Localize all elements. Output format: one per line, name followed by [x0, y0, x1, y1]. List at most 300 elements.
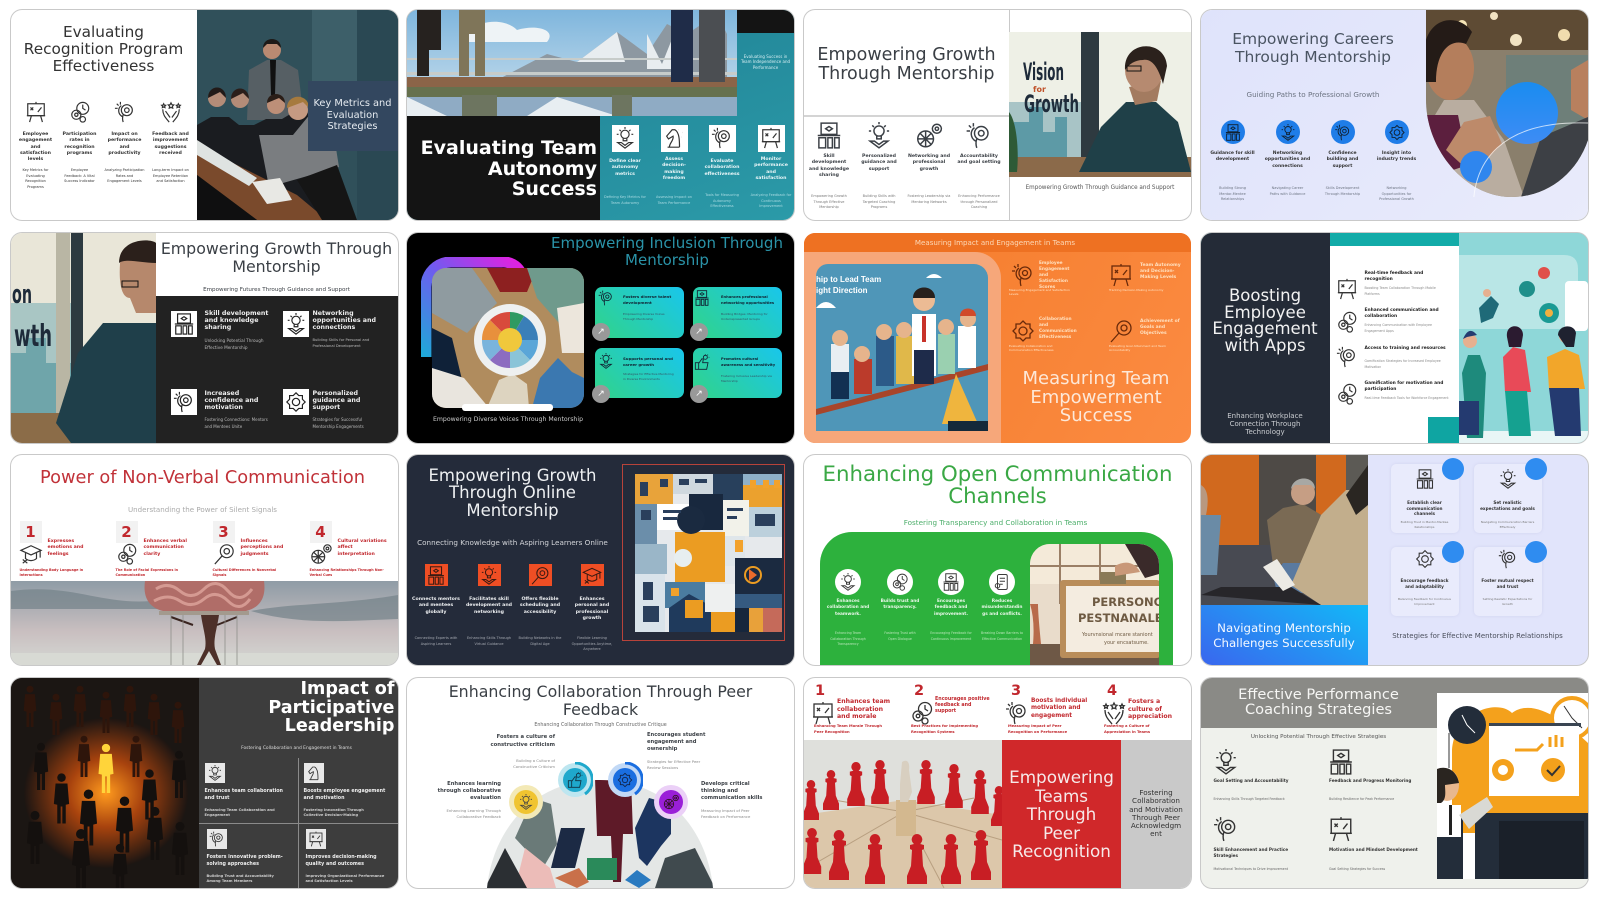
gray block: Through Peer	[1132, 813, 1180, 822]
title: Effective Performance	[1238, 686, 1399, 703]
photo: glowing figure in a crowd	[10, 678, 198, 888]
item: define metrics: autonomy	[612, 165, 638, 170]
item: teamwork: collaboration and	[827, 605, 869, 610]
item: misunderstandings: misunderstandin	[982, 605, 1022, 610]
item: confidence	[1324, 120, 1360, 196]
item 1: 1	[815, 683, 825, 699]
item: teamwork: Enhancing Team Collaboration Through Transparency	[830, 631, 866, 646]
card: channels: communication	[1406, 506, 1443, 510]
item 1: Enhances team	[837, 698, 890, 705]
item: guidance: Guidance for skill development	[1210, 151, 1255, 162]
navy side panel	[1200, 233, 1330, 443]
item: decision freedom: making	[664, 170, 684, 175]
title: Recognition Program	[24, 40, 183, 58]
text: learning: Collaborative Feedback	[457, 814, 501, 819]
item: collaboration: effectiveness	[704, 172, 740, 177]
item: real-time feedback: Boosting Team Collaboration Through Mobile Platforms	[1364, 286, 1436, 296]
photo: man at window with vision for growth	[1009, 32, 1191, 177]
item: connects: Connects mentors and mentees globally	[412, 597, 460, 615]
item: networking: Building Skills for Personal and Professional Development	[312, 338, 369, 348]
item: confidence: Increased confidence and motivation	[204, 390, 258, 411]
item: guidance: Personalized guidance and support	[861, 154, 897, 172]
item 2: 2	[121, 523, 132, 541]
item: autonomy: Tracking Decision-Making Autonomy	[1109, 288, 1163, 292]
text: constructive criticism	[467, 733, 555, 770]
panel: Empowering Inclusion Through Mentorship	[407, 233, 794, 443]
item: participation: Employee Feedback: A Vital Success Indicator	[64, 168, 95, 183]
title	[24, 23, 183, 75]
item 1: and morale	[837, 713, 876, 720]
item 3: 3	[218, 523, 229, 541]
item: networking: Navigating Career Paths with Guidance	[1270, 186, 1305, 196]
item 2: Enhances verbal communication clarity	[144, 539, 187, 557]
red title block	[1002, 740, 1121, 888]
title	[407, 683, 794, 719]
item: decision freedom: Assess	[665, 157, 683, 162]
gray block: Fostering	[1139, 788, 1173, 797]
item: participation: Participation rates in recognition programs	[63, 132, 96, 156]
title	[1200, 687, 1436, 717]
card: respect: Foster mutual respect	[1481, 578, 1534, 583]
item: impact: Impact on performance and productivity	[108, 132, 141, 156]
item: communication	[1338, 308, 1439, 333]
photo: sign on desk: your encsatsume.	[1104, 640, 1149, 646]
panel: Empowering Careers Through Mentorship	[1200, 10, 1588, 220]
item 4	[310, 521, 396, 578]
item: confidence	[171, 389, 268, 429]
item: networking: Networking opportunities and connections	[1265, 151, 1310, 169]
item: networking: Networking opportunities and connections	[312, 310, 376, 331]
blue title block	[1200, 605, 1368, 665]
card: channels: Building Trust in Mentor-Mentee Relationships	[1401, 520, 1448, 528]
item: goals	[1109, 318, 1180, 352]
ring icon yellow	[508, 784, 544, 820]
item: monitor: satisfaction	[756, 176, 786, 181]
card: respect: and trust	[1497, 584, 1518, 588]
card: networking	[693, 287, 782, 338]
item 2: feedback and	[935, 703, 972, 708]
item: confidence: Skills Development Through Mentorship	[1325, 186, 1360, 196]
photo: man at window with vision for growth: Vision	[1023, 58, 1064, 86]
item: problem solving	[206, 829, 294, 887]
illustration: team on a rising plank	[816, 264, 988, 431]
item: skills: Unlocking Potential Through Effective Mentorship	[204, 338, 264, 350]
item: accountability: Accountability and goal setting	[957, 154, 1001, 165]
caption: Empowering Growth Through Guidance and Support	[1026, 185, 1174, 191]
item: gamification	[1338, 380, 1449, 405]
item: skill enhancement	[1214, 816, 1314, 876]
photo: bridge and mountains	[407, 10, 737, 116]
item: misunderstandings: gs and conflicts.	[982, 612, 1022, 617]
photo: man at window	[11, 233, 156, 443]
item: skill enhancement: Skill Enhancement and Practice	[1214, 847, 1288, 852]
gray block	[1121, 740, 1191, 888]
item: monitor: performance	[754, 163, 788, 168]
text: constructive criticism: Building a Culture of	[516, 758, 555, 763]
item: decision freedom: freedom	[663, 176, 685, 181]
item 1: Peer Recognition	[814, 730, 850, 734]
text: critical thinking: Measuring Impact of Peer	[701, 808, 750, 813]
text: constructive criticism: Fosters a culture of	[497, 734, 555, 740]
subtitle: Fostering Transparency and Collaboration in Teams	[904, 518, 1087, 527]
item: progress monitoring: Building Resilience for Peak Performance	[1329, 797, 1394, 801]
item: impact	[104, 102, 145, 183]
item: define metrics: Define clear	[609, 159, 641, 164]
item: confidence: Fostering Connections: Mentors and Mentees Unite	[204, 417, 268, 429]
card: expectations: expectations and goals	[1480, 506, 1535, 510]
item: flexible: Building Networks in the Digital Age	[519, 636, 561, 646]
subtitle: Technology	[1245, 428, 1285, 436]
progress pill	[462, 404, 553, 411]
item 4	[1102, 684, 1190, 738]
photo: man at window: on	[12, 280, 32, 310]
item: real-time feedback	[1338, 270, 1436, 300]
item: industry	[1377, 120, 1416, 201]
item: skills: Empowering Growth Through Effective Mentorship	[811, 194, 847, 209]
item: real-time feedback: Real-time feedback and	[1364, 271, 1423, 276]
item 3: Boosts individual motivation and engagement	[1031, 698, 1087, 719]
item: trust: Builds trust and transparency.	[881, 599, 919, 610]
text: critical thinking: thinking and	[701, 788, 738, 794]
gray block: and Motivation	[1129, 805, 1183, 814]
item 2: The Role of Facial Expressions in Communication	[116, 568, 178, 577]
item: goal setting	[1214, 749, 1314, 805]
item: communication: Enhanced communication and collaboration	[1364, 308, 1439, 319]
top band: Measuring Impact and Engagement in Teams	[915, 238, 1075, 247]
title: Power of Non-Verbal Communication	[40, 467, 365, 488]
subtitle: Empowering Futures Through Guidance and Support	[203, 287, 350, 293]
title: Empowering Growth Through Mentorship	[161, 239, 392, 276]
item: industry: Insight into industry trends	[1377, 151, 1416, 162]
illustration: team on a rising plank: ight Direction	[816, 286, 868, 295]
subtitle: Connection Through	[1230, 420, 1300, 428]
item: decisions: Improves decision-making quality and outcomes	[306, 855, 377, 867]
title: Empowering Inclusion Through Mentorship	[551, 234, 783, 269]
text: critical thinking: Develops critical	[701, 781, 750, 787]
text: student engagement: Encourages student engagement and ownership	[647, 732, 705, 752]
title: Evaluating	[63, 23, 144, 41]
item: collaboration	[704, 125, 740, 208]
subtitle: Evaluating Success in Team Independence and Performance	[741, 54, 790, 70]
item: participation	[62, 102, 96, 183]
item: trust	[204, 763, 294, 821]
item: engagement: Measuring Engagement and Satisfaction Levels	[1009, 288, 1070, 296]
item 1	[812, 684, 904, 738]
gray block: Collaboration	[1132, 796, 1180, 805]
panel: Navigating Mentorship Challenges Successfully	[1200, 455, 1588, 665]
photo: peers seated in circle with icon rings	[487, 780, 713, 888]
card: culture: Fostering Inclusive Leadership via Mentorship	[721, 374, 772, 383]
item: skill enhancement: Motivational Techniques to Drive Improvement	[1214, 867, 1288, 871]
item: teamwork: teamwork.	[835, 612, 861, 617]
card: expectations	[1474, 464, 1542, 533]
item: monitor: Monitor	[761, 157, 781, 162]
item: confidence: Confidence building and support	[1327, 151, 1358, 169]
text: learning: evaluation	[470, 795, 501, 801]
text: learning: through collaborative	[438, 788, 501, 794]
card: respect: Setting Realistic Expectations for Growth	[1483, 597, 1532, 606]
card: adaptability	[1390, 547, 1458, 616]
item: problem solving: Building Trust and Accountability Among Team Members	[206, 874, 274, 883]
card: adaptability: and adaptability	[1405, 584, 1444, 588]
item: autonomy	[1109, 262, 1181, 292]
item: misunderstandings	[978, 569, 1026, 653]
panel: Boosting Employee Engagement with Apps	[1200, 233, 1588, 443]
item 4: 4	[315, 523, 326, 541]
title: Impact of Participative Leadership	[268, 679, 394, 736]
card: channels	[1390, 464, 1458, 533]
item 2: Encourages positive	[935, 697, 990, 702]
item: communication: Enhancing Communication with Employee Engagement Apps	[1364, 323, 1432, 333]
item: collaboration: collaboration	[705, 165, 739, 170]
item: networking: Fostering Leadership via Mentoring Networks	[908, 194, 950, 204]
item 4: Cultural variations affect interpretation	[338, 539, 387, 557]
red title block: Through	[1027, 804, 1096, 824]
item: misunderstandings: Breaking Down Barriers to Effective Communication	[981, 631, 1023, 641]
gradient frame	[421, 257, 524, 357]
item: growth	[568, 564, 616, 654]
item: accountability	[957, 123, 1001, 209]
panel: Power of Non-Verbal Communication	[10, 455, 398, 665]
text: learning: Enhancing Learning Through	[446, 808, 501, 813]
item: decision freedom: decision-	[662, 163, 686, 168]
item 4: 4	[1107, 683, 1117, 699]
item: industry: Networking Opportunities for Professional Growth	[1379, 186, 1414, 201]
text: student engagement	[647, 732, 717, 771]
photo: man at window with vision for growth: Growth	[1024, 90, 1079, 118]
item: goals: Achievement of Goals and Objectives	[1140, 319, 1180, 336]
title: Effectiveness	[53, 57, 154, 75]
item: define metrics: metrics	[615, 172, 635, 177]
red title block: Teams	[1035, 786, 1088, 806]
item: networking	[283, 310, 376, 348]
item: engagement: Employee Engagement and Satisfaction Scores	[1039, 261, 1069, 290]
item: mindset: Goal Setting Strategies for Success	[1329, 867, 1385, 871]
panel: Enhancing Open Communication Channels	[804, 455, 1191, 665]
item: problem solving: Fosters innovative problem-solving approaches	[206, 855, 283, 867]
item: trust: Enhancing Team Collaboration and Engagement	[204, 808, 275, 817]
card: respect	[1474, 547, 1542, 616]
item: guidance: Building Strong Mentor-Mentee Relationships	[1219, 186, 1246, 201]
item: motivation: Fostering Innovation Through Collective Decision-Making	[304, 808, 364, 817]
title: Boosting Employee Engagement with Apps	[1212, 286, 1318, 355]
red outline	[622, 464, 785, 641]
panel: Empowering Teams Through Peer Recognition	[804, 678, 1191, 888]
item 1: 1	[25, 523, 36, 541]
item: guidance: Building Skills with Targeted Coaching Programs	[863, 194, 895, 209]
item 4: Fostering a Culture of	[1104, 724, 1150, 728]
item: define metrics: Defining Key Metrics for Team Autonomy	[604, 195, 646, 205]
photo: red pawns around leader	[804, 740, 1002, 888]
item: monitor: Analyzing Feedback for Continuous Improvement	[751, 193, 791, 208]
item 2: Recognition Systems	[911, 730, 955, 734]
illustration: digital collage	[635, 474, 782, 632]
item: goal setting: Enhancing Skills Through Targeted Feedback	[1214, 797, 1285, 801]
card: adaptability: Balancing Feedback for Continuous Improvement	[1398, 597, 1451, 606]
item: engagement: Employee engagement and satisfaction levels	[19, 132, 52, 162]
illustration: team on a rising plank: hip to Lead Team	[816, 275, 881, 284]
title: Empowering Growth Through Mentorship	[817, 45, 996, 84]
illustration: presenter with chart board	[1436, 693, 1588, 879]
subtitle: Fostering Collaboration and Engagement in Teams	[241, 746, 352, 751]
item: engagement	[1009, 260, 1070, 296]
teal band	[1330, 233, 1458, 246]
item: impact: Analyzing Participation Rates and Engagement Levels	[104, 168, 145, 183]
item 2	[116, 521, 208, 578]
text: student engagement: Strategies for Effective Peer	[647, 759, 700, 764]
title: Evaluating Team Autonomy Success	[421, 137, 597, 200]
item: facilitates	[465, 564, 513, 654]
item: skill enhancement: Strategies	[1214, 853, 1238, 858]
item: skills: Skill	[823, 154, 835, 159]
card: culture	[693, 348, 782, 398]
item: trust: Fostering Trust with Open Dialogue	[884, 631, 916, 641]
item: engagement: Key Metrics for Evaluating Recognition Programs	[22, 168, 49, 189]
item: motivation: Boosts employee engagement and motivation	[304, 789, 385, 801]
item: feedback: Encourages feedback and improvement.	[934, 599, 968, 617]
item: progress monitoring: Feedback and Progress Monitoring	[1329, 778, 1411, 783]
item: goal setting: Goal Setting and Accountability	[1214, 778, 1288, 783]
item: personalized: Personalized guidance and support	[312, 390, 360, 411]
red title block: Peer	[1043, 822, 1080, 842]
item: skills	[171, 310, 268, 350]
card: culture: Promotes cultural	[721, 357, 758, 361]
item: collaboration	[1009, 316, 1077, 352]
item 1	[20, 521, 84, 577]
card: talent	[595, 287, 684, 338]
item: decisions	[306, 829, 396, 887]
item: decision freedom: Assessing Impact on Team Performance	[656, 195, 692, 205]
grid lines	[298, 758, 299, 888]
card: adaptability: Encourage feedback	[1401, 578, 1448, 583]
item: goals: Evaluating Goal Attainment and Team Accountability	[1109, 344, 1166, 352]
panel: Empowering Growth Through Mentorship (dark)	[10, 233, 398, 443]
item 2	[909, 684, 1001, 738]
item: decisions: Improving Organizational Performance and Satisfaction Levels	[306, 874, 384, 883]
item: skills: development and knowledge sharing	[809, 160, 849, 178]
photo: sign on desk	[1030, 544, 1159, 665]
card: career: Strategies for Effective Mentoring in Diverse Environments	[623, 372, 674, 381]
panel: Empowering Growth Through Mentorship (white)	[804, 10, 1191, 220]
item: feedback	[152, 102, 189, 183]
item: trust	[876, 569, 924, 653]
item: guidance	[861, 122, 897, 209]
gray block: Acknowledgm	[1131, 821, 1181, 830]
item: accountability: Enhancing Performance through Personalized Coaching	[958, 194, 1000, 209]
green panel	[820, 532, 1173, 665]
item: guidance	[1210, 120, 1255, 201]
subtitle: Enhancing Collaboration Through Constructive Critique	[534, 723, 667, 728]
teal corner	[1428, 417, 1458, 443]
item 3	[1006, 684, 1098, 738]
dark panel	[156, 296, 398, 443]
item 3: Cultural Differences in Nonverbal Signals	[212, 568, 276, 577]
peach frame	[804, 252, 1001, 443]
item: monitor	[750, 125, 792, 208]
card: culture: awareness and sensitivity	[721, 363, 775, 367]
caption: Empowering Diverse Voices Through Mentorship	[433, 416, 583, 423]
caption: Strategies for Effective Mentorship Relationships	[1392, 632, 1563, 640]
red title block: Recognition	[1012, 841, 1111, 861]
ring icon blue	[607, 762, 643, 798]
title: Empowering Growth Through Online Mentorship	[428, 466, 596, 520]
red title block: Empowering	[1009, 767, 1114, 787]
item: mindset	[1329, 816, 1429, 876]
item 2: support	[935, 709, 956, 714]
text: constructive criticism: Constructive Criticism	[513, 764, 555, 769]
text: student engagement: Review Sessions	[647, 765, 678, 770]
callout: key metrics: Key Metrics and Evaluation Strategies	[314, 98, 391, 132]
item: facilitates: Enhancing Skills Through Virtual Guidance	[467, 636, 511, 646]
panel: Effective Performance Coaching Strategies	[1200, 678, 1588, 888]
item: teamwork	[824, 569, 872, 653]
card: career: ↗	[597, 389, 605, 399]
item: collaboration: Tools for Measuring Autonomy Effectiveness	[705, 193, 739, 208]
text: critical thinking	[701, 781, 775, 820]
title: Coaching Strategies	[1245, 701, 1392, 718]
item: decision freedom	[656, 125, 692, 205]
item 1: Understanding Body Language in Interactions	[20, 568, 83, 577]
title: Measuring Team Empowerment Success	[1023, 368, 1169, 426]
panel: Enhancing Collaboration Through Peer Feedback	[407, 678, 794, 888]
callout: key metrics	[308, 81, 398, 151]
gray header band	[1200, 678, 1588, 728]
card: networking: ↗	[695, 327, 703, 337]
item: motivation	[304, 763, 394, 821]
dividers	[1009, 10, 1010, 220]
item: feedback	[927, 569, 975, 653]
photo: two colleagues talking with blue circles	[1426, 10, 1588, 197]
photo: sign on desk: Yourvnsional mcare staniont	[1081, 632, 1153, 638]
blue title block: Navigating Mentorship Challenges Successfully	[1213, 621, 1355, 650]
card: expectations: Navigating Communication Barriers Effectively	[1481, 520, 1534, 528]
item 4: Enhancing Relationships Through Non-Verbal Cues	[310, 568, 384, 577]
ring icon purple	[653, 784, 689, 820]
item: growth: Flexible Learning Opportunities Anytime, Anywhere	[572, 636, 612, 651]
panel: Evaluating Team Autonomy Success	[407, 10, 794, 220]
panel: Empowering Growth Through Online Mentorship	[407, 455, 794, 665]
item: define metrics	[604, 125, 646, 205]
title: Enhancing Collaboration Through Peer	[449, 682, 752, 701]
item: networking	[1264, 120, 1310, 196]
item: growth: Enhances personal and professional growth	[575, 597, 609, 621]
top band	[804, 233, 1191, 252]
subtitle: Understanding the Power of Silent Signals	[128, 505, 277, 514]
photo: circle of people around a wheel	[432, 268, 584, 408]
subtitle: Guiding Paths to Professional Growth	[1247, 90, 1379, 99]
item: teamwork: Enhances	[836, 599, 860, 604]
item: connects: Connecting Experts with Aspiring Learners	[415, 636, 457, 646]
card: career: Supports personal and career growth	[623, 356, 673, 367]
item 1: Enhancing Team Morale Through	[814, 724, 882, 728]
item 3: Recognition on Performance	[1008, 730, 1067, 734]
card: networking: Enhances professional networking opportunities	[721, 295, 774, 305]
item: networking: professional growth	[913, 160, 945, 172]
card: talent: ↗	[597, 327, 605, 337]
item: feedback: Long-term Impact on Employee Retention and Satisfaction	[152, 168, 189, 183]
title: Feedback	[563, 700, 638, 719]
item: skills	[809, 122, 849, 209]
item: training: Access to training and resources	[1364, 346, 1446, 351]
item: networking: Networking and	[908, 154, 950, 159]
item: flexible: Offers flexible scheduling and accessibility	[520, 597, 560, 615]
item: gamification: Real-time Feedback Tools for Workforce Engagement	[1364, 396, 1449, 400]
item 1: Expresses emotions and feelings	[48, 539, 83, 557]
item: collaboration: Evaluate	[711, 159, 733, 164]
item 2: Best Practices for Implementing	[911, 724, 978, 728]
black title block	[407, 116, 600, 220]
title: Empowering Careers Through Mentorship	[1232, 30, 1394, 66]
